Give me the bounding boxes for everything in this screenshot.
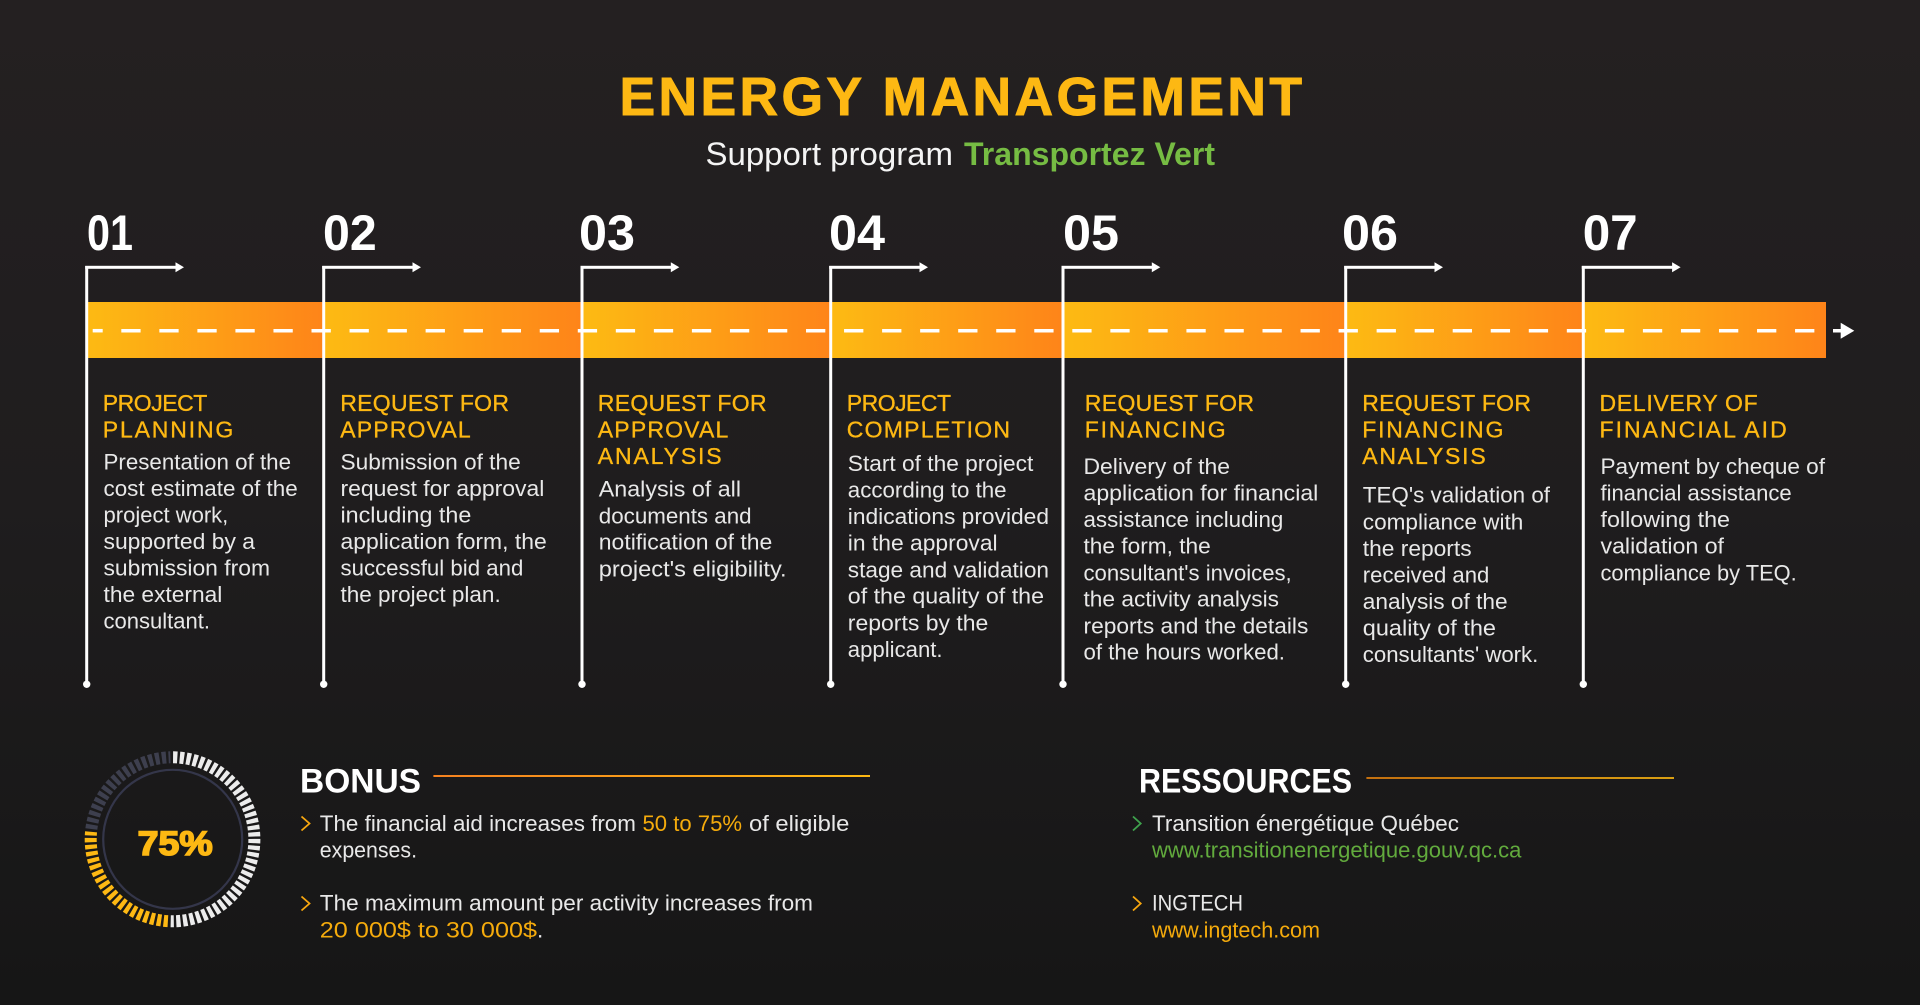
- step heading: DELIVERY OF: [1600, 390, 1758, 416]
- panel: step 07: [1580, 205, 1826, 688]
- bullet: maximum amount: 20 000$ to 30 000$: [320, 918, 538, 943]
- step description: applicant.: [848, 637, 943, 662]
- step heading: REQUEST FOR: [1362, 390, 1531, 416]
- marker pole and arrow: [320, 262, 421, 688]
- step number: 05: [1063, 205, 1119, 261]
- bullet: maximum amount: [302, 891, 813, 943]
- panel: step 01: [83, 205, 298, 688]
- panel: step 02: [320, 205, 547, 688]
- step heading: APPROVAL: [598, 417, 729, 443]
- step description: quality of the: [1363, 615, 1496, 640]
- step description: reports by the: [848, 610, 988, 635]
- step description: [1084, 454, 1318, 665]
- step heading: FINANCING: [1085, 417, 1226, 443]
- step description: [340, 449, 547, 607]
- step heading: [1085, 390, 1254, 443]
- step heading: [847, 390, 1010, 443]
- step heading: REQUEST FOR: [1085, 390, 1254, 416]
- step description: [1363, 483, 1551, 667]
- step description: analysis of the: [1363, 589, 1508, 614]
- step description: including the: [340, 502, 471, 527]
- step number: 01: [87, 205, 133, 261]
- step description: supported by a: [104, 529, 255, 554]
- step description: [1600, 454, 1826, 585]
- resource: Transition energetique: [1133, 811, 1522, 863]
- heading rule: [1366, 777, 1674, 779]
- step description: TEQ's validation of: [1363, 483, 1551, 508]
- step number: 04: [829, 205, 885, 261]
- step number: 07: [1583, 205, 1638, 261]
- bullet: aid increase: [302, 811, 849, 863]
- step description: Analysis of all: [599, 477, 741, 502]
- marker pole and arrow: [827, 262, 928, 688]
- marker pole and arrow: [83, 262, 184, 688]
- step description: Delivery of the: [1084, 454, 1230, 479]
- heading: bonus: BONUS: [300, 763, 421, 801]
- panel: step 03: [578, 205, 787, 688]
- resource: Transition energetique: www.transitionenergetique.gouv.qc.ca: [1151, 838, 1522, 863]
- step heading: PROJECT: [103, 390, 207, 416]
- step description: [599, 477, 787, 581]
- subtitle: [706, 136, 1215, 172]
- step description: submission from: [104, 555, 270, 580]
- resource: Ingtech: [1133, 891, 1320, 943]
- step number: 06: [1342, 205, 1398, 261]
- step description: Presentation of the: [104, 449, 291, 474]
- step heading: COMPLETION: [847, 417, 1010, 443]
- step heading: PLANNING: [103, 417, 233, 443]
- marker pole and arrow: [1580, 262, 1681, 688]
- step description: the external: [104, 582, 222, 607]
- step description: application form, the: [340, 529, 547, 554]
- step description: financial assistance: [1600, 481, 1792, 506]
- step description: [848, 451, 1049, 662]
- step heading: FINANCIAL AID: [1600, 417, 1787, 443]
- bullet: aid increase: 50 to 75%: [642, 811, 742, 836]
- bullet: maximum amount: .: [537, 918, 543, 943]
- step description: documents and: [599, 503, 752, 528]
- step description: consultant.: [104, 609, 210, 634]
- resource: Transition energetique: Transition énergétique Québec: [1152, 811, 1459, 836]
- step description: indications provided: [848, 504, 1049, 529]
- step number: 03: [579, 205, 635, 261]
- marker pole and arrow: [1342, 262, 1443, 688]
- step description: Submission of the: [340, 449, 521, 474]
- resource: Ingtech: www.ingtech.com: [1151, 918, 1320, 943]
- step heading: [103, 390, 233, 443]
- step description: consultants' work.: [1363, 642, 1538, 667]
- step description: notification of the: [599, 530, 772, 555]
- step description: validation of: [1600, 534, 1725, 559]
- step number: 02: [323, 205, 377, 261]
- step description: compliance by TEQ.: [1600, 560, 1797, 585]
- step heading: REQUEST FOR: [340, 390, 509, 416]
- subtitle: Support program: [706, 136, 953, 172]
- panel: bonus: [300, 763, 870, 943]
- step description: request for approval: [340, 476, 544, 501]
- step heading: PROJECT: [847, 390, 951, 416]
- panel: step 06: [1342, 205, 1551, 688]
- bullet: maximum amount: The maximum amount per activity increases from: [320, 891, 813, 916]
- marker pole and arrow: [578, 262, 679, 688]
- title: ENERGY MANAGEMENT: [620, 68, 1302, 127]
- subtitle: Transportez Vert: [964, 136, 1215, 172]
- bullet: aid increase: expenses.: [320, 838, 417, 863]
- step description: the activity analysis: [1084, 587, 1279, 612]
- step description: assistance including: [1084, 507, 1283, 532]
- panel: step 05: [1059, 205, 1318, 688]
- step description: Start of the project: [848, 451, 1034, 476]
- step description: project's eligibility.: [599, 556, 787, 581]
- step description: the form, the: [1084, 534, 1211, 559]
- step description: consultant's invoices,: [1084, 560, 1292, 585]
- bullet: aid increase: The financial aid increases from: [320, 811, 636, 836]
- step description: the project plan.: [340, 582, 501, 607]
- marker pole and arrow: [1059, 262, 1160, 688]
- heading: ressources: RESSOURCES: [1139, 763, 1352, 801]
- step description: cost estimate of the: [104, 476, 298, 501]
- step description: of the hours worked.: [1084, 640, 1285, 665]
- step description: according to the: [848, 478, 1007, 503]
- arrow: timeline end: [1833, 323, 1854, 339]
- step description: stage and validation: [848, 557, 1049, 582]
- step description: received and: [1363, 562, 1489, 587]
- chart: 75% radial gauge: 75%: [138, 825, 213, 863]
- step heading: [598, 390, 767, 469]
- step description: successful bid and: [340, 555, 523, 580]
- step heading: REQUEST FOR: [598, 390, 767, 416]
- step description: following the: [1600, 507, 1730, 532]
- step description: compliance with: [1363, 509, 1523, 534]
- resource: Ingtech: INGTECH: [1152, 891, 1243, 916]
- step heading: ANALYSIS: [1362, 443, 1486, 469]
- step description: in the approval: [848, 531, 998, 556]
- step description: the reports: [1363, 536, 1472, 561]
- panel: resources: [1133, 763, 1674, 943]
- step heading: ANALYSIS: [598, 443, 722, 469]
- step description: Payment by cheque of: [1600, 454, 1826, 479]
- step heading: [340, 390, 509, 443]
- step heading: [1362, 390, 1531, 469]
- step heading: FINANCING: [1362, 417, 1503, 443]
- chart: 75% radial gauge: [91, 757, 254, 921]
- panel: step 04: [827, 205, 1049, 688]
- step description: reports and the details: [1084, 613, 1308, 638]
- step description: of the quality of the: [848, 584, 1044, 609]
- bullet: aid increase: of eligible: [749, 811, 849, 836]
- timeline bar: [87, 302, 1826, 358]
- step description: project work,: [104, 502, 228, 527]
- step heading: APPROVAL: [340, 417, 471, 443]
- step description: application for financial: [1084, 481, 1318, 506]
- step description: [104, 449, 298, 634]
- heading rule: [433, 775, 870, 777]
- step heading: [1600, 390, 1787, 443]
